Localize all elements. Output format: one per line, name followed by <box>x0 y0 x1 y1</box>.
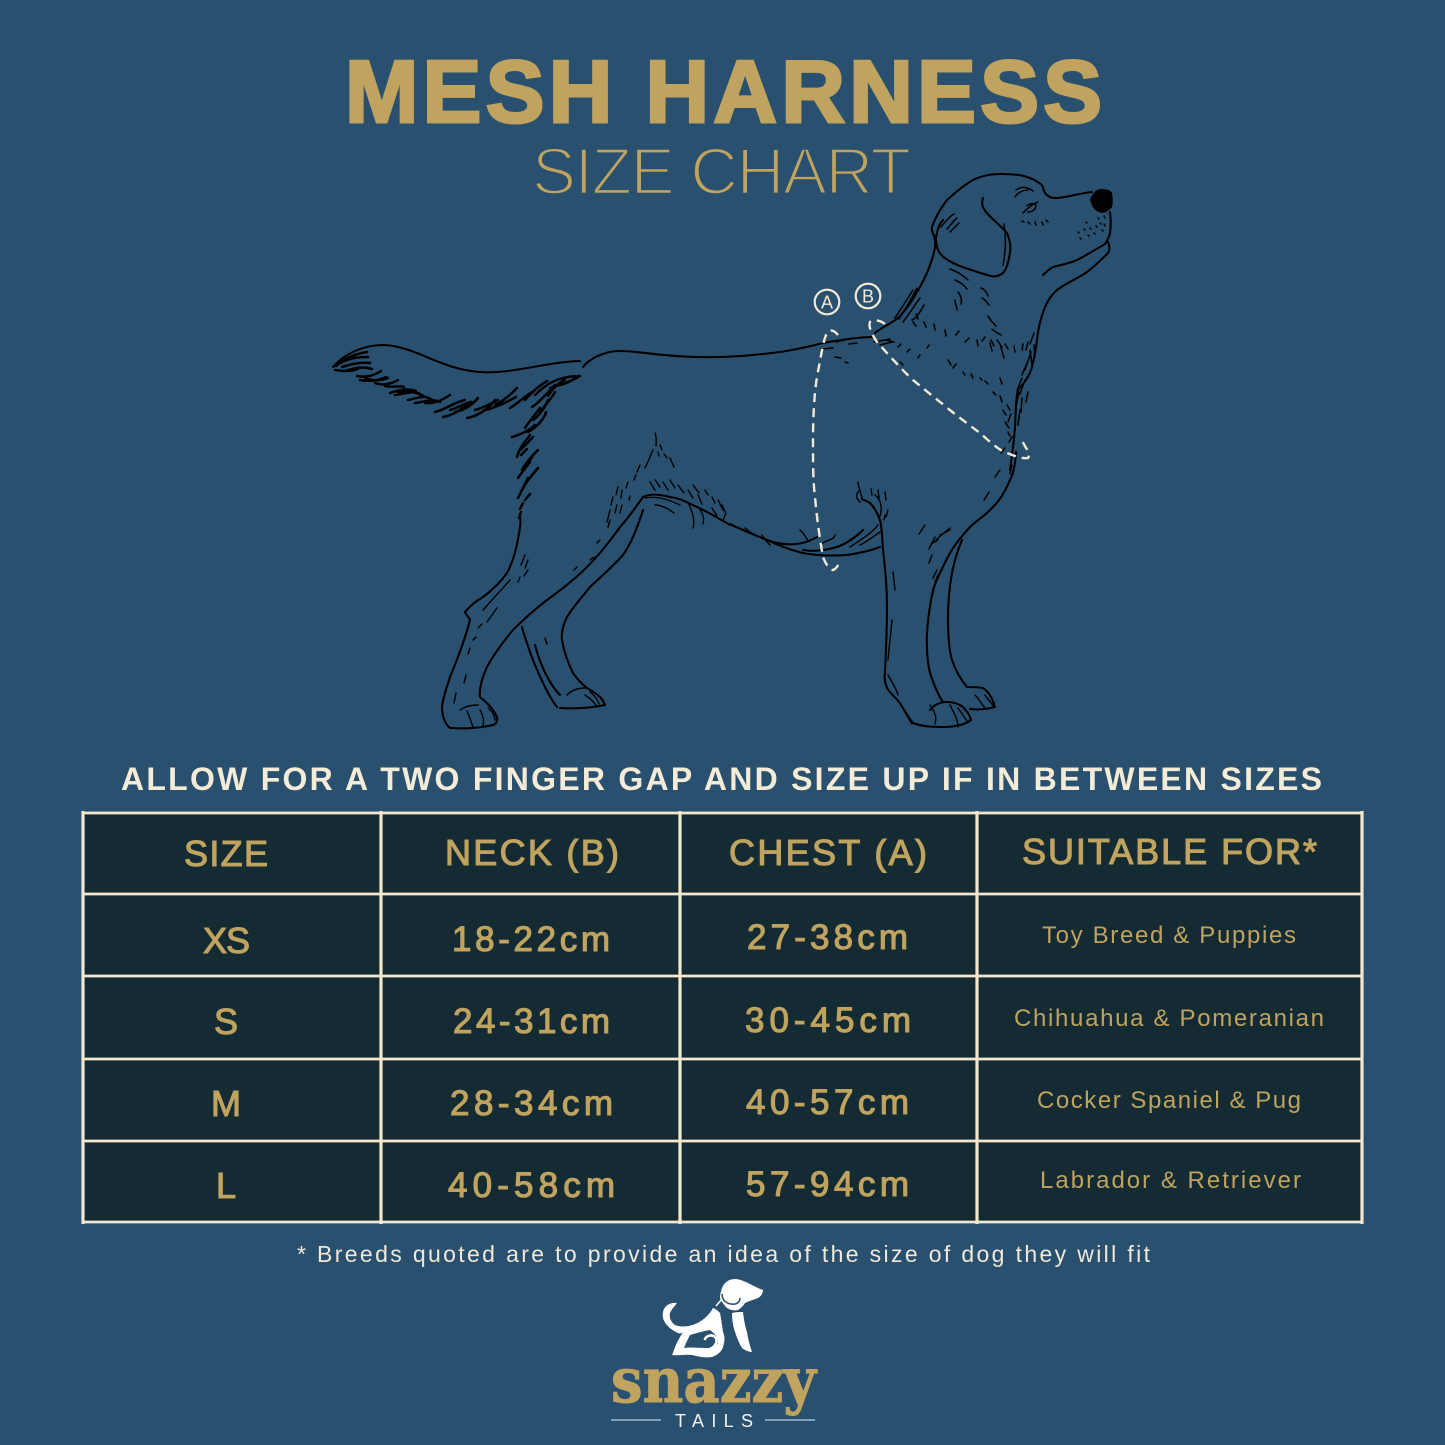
logo: snazzy tails <box>611 1279 818 1431</box>
row XS: 18-22cm <box>452 920 610 959</box>
logo icon: dog and cat <box>663 1279 763 1357</box>
flank and hind fur <box>454 433 1012 727</box>
row XS: 27-38cm <box>747 918 908 957</box>
measurement B: neck dashed line <box>869 320 1029 458</box>
row L: 40-58cm <box>448 1166 615 1205</box>
illustration: dog outline <box>333 174 1113 728</box>
row S: 24-31cm <box>453 1002 610 1041</box>
row L: L <box>216 1165 236 1206</box>
header row <box>184 831 1317 874</box>
row XS: Toy Breed & Puppies <box>1042 922 1296 949</box>
logo wordmark: snazzy <box>611 1344 818 1417</box>
header row: SUITABLE FOR* <box>1022 831 1317 872</box>
fit instruction heading: ALLOW FOR A TWO FINGER GAP AND SIZE UP IF IN BETWEEN SIZES <box>121 761 1322 797</box>
row XS <box>203 918 1296 961</box>
row M: Cocker Spaniel & Pug <box>1037 1087 1301 1114</box>
title: MESH HARNESS <box>345 42 1102 141</box>
footnote: * Breeds quoted are to provide an idea of the size of dog they will fit <box>297 1241 1151 1267</box>
marker A: A <box>821 292 833 312</box>
tail fur <box>335 352 580 518</box>
row M: 40-57cm <box>746 1083 909 1122</box>
subtitle: size chart: SIZE CHART <box>532 134 911 208</box>
row XS: XS <box>203 920 250 961</box>
row M: 28-34cm <box>450 1084 613 1123</box>
row L: 57-94cm <box>746 1165 909 1204</box>
row S: 30-45cm <box>745 1001 911 1040</box>
marker B: B <box>862 286 874 306</box>
row S: Chihuahua & Pomeranian <box>1014 1005 1324 1032</box>
row M: M <box>211 1083 241 1124</box>
measurement A: chest dashed line <box>813 331 840 570</box>
marker A <box>815 290 839 314</box>
row L: Labrador & Retriever <box>1040 1167 1301 1194</box>
header row: SIZE <box>184 833 268 874</box>
size table <box>83 811 1362 1224</box>
row M <box>211 1083 1301 1124</box>
row S <box>214 1001 1324 1042</box>
logo tagline: TAILS <box>675 1411 753 1431</box>
dog body outline <box>333 174 1111 728</box>
row L <box>216 1165 1301 1206</box>
dog nose <box>1090 189 1113 213</box>
header row: CHEST (A) <box>729 832 927 873</box>
dog fur and detail strokes <box>821 187 1105 453</box>
header row: NECK (B) <box>445 832 619 873</box>
marker B <box>856 284 880 308</box>
row S: S <box>214 1001 238 1042</box>
